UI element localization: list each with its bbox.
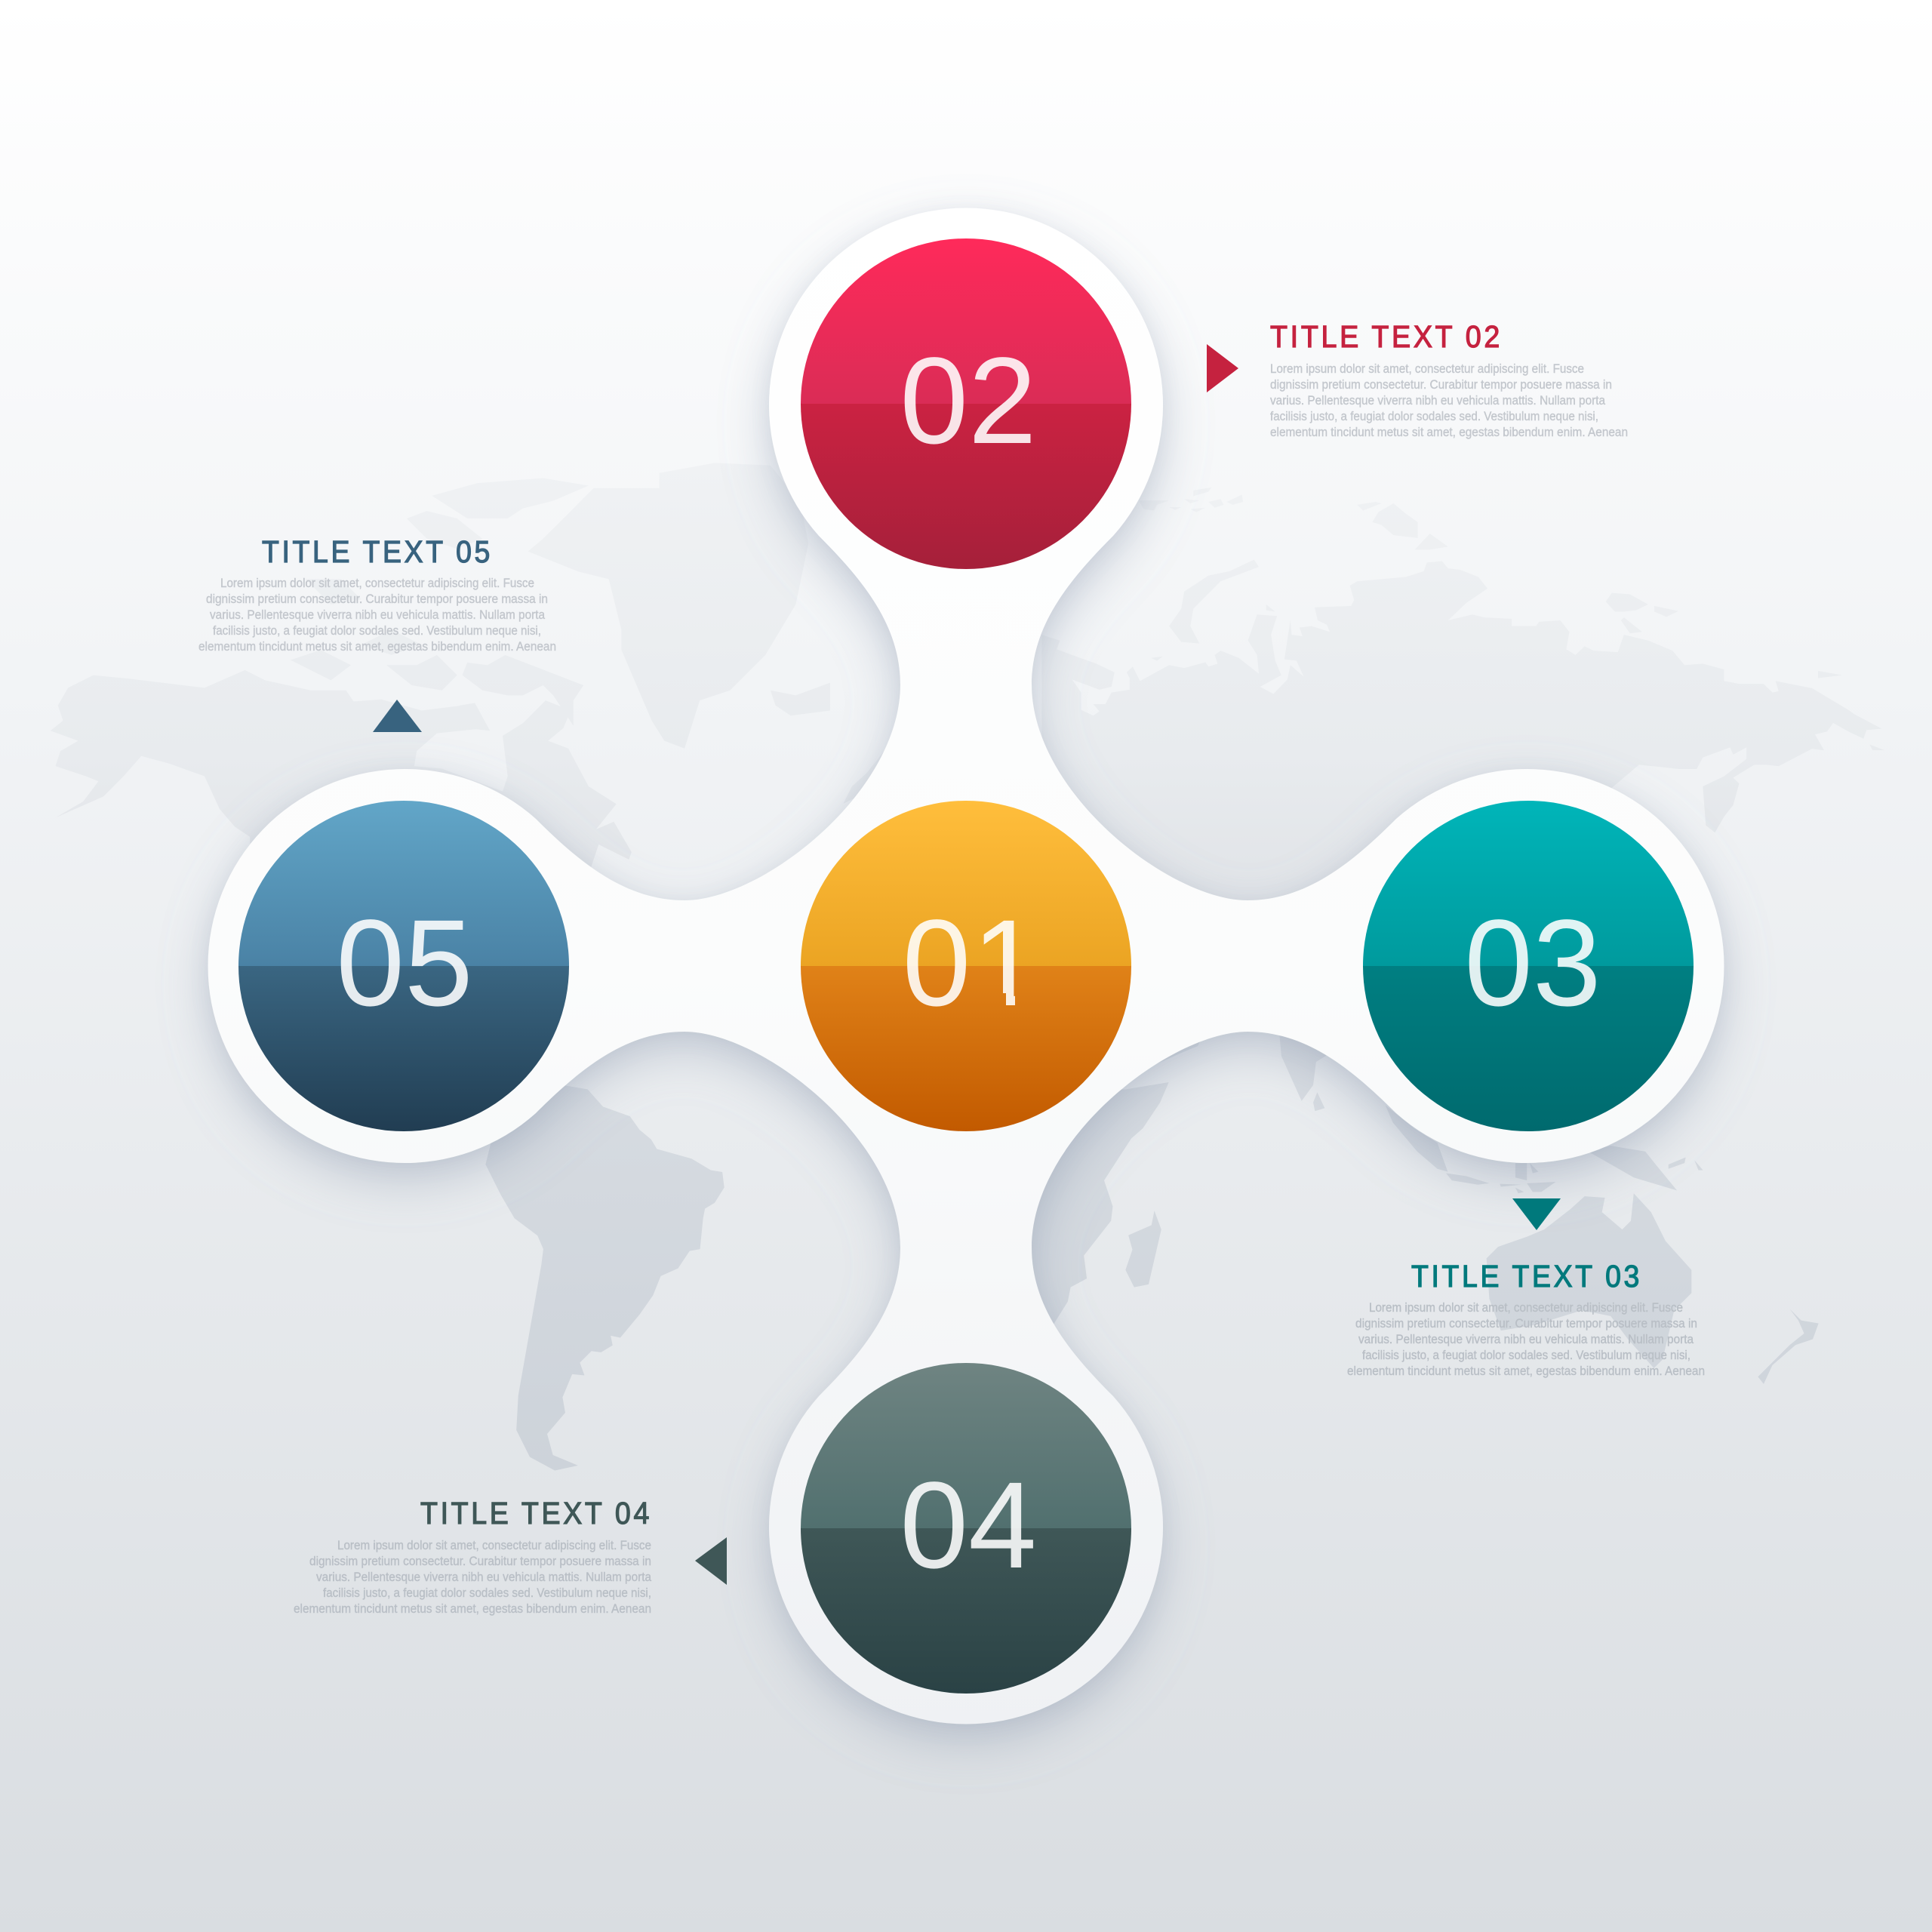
step 04 circle — [801, 1363, 1131, 1694]
text block 02 — [1270, 319, 1628, 439]
arrow 04 — [695, 1537, 727, 1585]
text block 03 — [1347, 1259, 1705, 1378]
text block 04: Lorem ipsum dolor sit amet, consectetur adipiscing elit. Fusce — [337, 1538, 651, 1552]
arrow 03 — [1512, 1198, 1561, 1230]
text block 04: TITLE TEXT 04 — [420, 1496, 652, 1531]
arrow 02 — [1207, 344, 1238, 392]
text block 03: TITLE TEXT 03 — [1411, 1259, 1642, 1294]
text block 02: TITLE TEXT 02 — [1270, 319, 1503, 354]
text block 03: dignissim pretium consectetur. Curabitur tempor posuere massa in — [1355, 1316, 1697, 1331]
text block 03: elementum tincidunt metus sit amet, egestas bibendum enim. Aenean — [1347, 1364, 1705, 1378]
text block 05: dignissim pretium consectetur. Curabitur tempor posuere massa in — [206, 592, 548, 606]
text block 04: elementum tincidunt metus sit amet, egestas bibendum enim. Aenean — [294, 1601, 651, 1616]
text block 04: dignissim pretium consectetur. Curabitur tempor posuere massa in — [309, 1554, 651, 1568]
text block 04: varius. Pellentesque viverra nibh eu vehicula mattis. Nullam porta — [316, 1570, 651, 1584]
text block 05: varius. Pellentesque viverra nibh eu vehicula mattis. Nullam porta — [210, 608, 545, 622]
map: north america, greenland and arctic — [51, 463, 830, 958]
step 03 circle — [1363, 801, 1694, 1131]
map: south america — [485, 1085, 724, 1470]
step 02 circle: 02 — [900, 331, 1037, 469]
text block 02: dignissim pretium consectetur. Curabitur tempor posuere massa in — [1270, 377, 1612, 392]
world map — [51, 463, 1884, 1470]
map: eurasia and arctic islands — [1041, 488, 1884, 903]
step 03 circle: 03 — [1464, 894, 1601, 1032]
step 01 circle — [801, 801, 1131, 1131]
step 01 circle: 0 — [903, 894, 971, 1032]
arrow 05 — [373, 700, 422, 732]
map: africa, india, indonesia, australia, new zealand — [981, 1024, 1819, 1384]
text block 04: facilisis justo, a feugiat dolor sodales sed. Vestibulum neque nisi, — [323, 1586, 651, 1600]
text block 05: Lorem ipsum dolor sit amet, consectetur adipiscing elit. Fusce — [220, 576, 534, 590]
text block 03: varius. Pellentesque viverra nibh eu vehicula mattis. Nullam porta — [1358, 1332, 1694, 1346]
text block 02: Lorem ipsum dolor sit amet, consectetur adipiscing elit. Fusce — [1270, 361, 1584, 376]
text block 05: facilisis justo, a feugiat dolor sodales sed. Vestibulum neque nisi, — [213, 623, 541, 638]
text block 03: facilisis justo, a feugiat dolor sodales sed. Vestibulum neque nisi, — [1362, 1348, 1690, 1362]
text block 03: Lorem ipsum dolor sit amet, consectetur adipiscing elit. Fusce — [1369, 1300, 1683, 1315]
text block 05: TITLE TEXT 05 — [262, 534, 493, 569]
text block 02: elementum tincidunt metus sit amet, egestas bibendum enim. Aenean — [1270, 425, 1628, 439]
text block 05: elementum tincidunt metus sit amet, egestas bibendum enim. Aenean — [198, 639, 556, 654]
text block 02: facilisis justo, a feugiat dolor sodales sed. Vestibulum neque nisi, — [1270, 409, 1598, 423]
step 01 circle: 1 — [972, 894, 1041, 1032]
map: british isles — [843, 752, 884, 804]
step 05 circle — [238, 801, 569, 1131]
central cross shape — [208, 208, 1724, 1724]
step 04 circle: 04 — [900, 1456, 1037, 1594]
text block 04 — [294, 1496, 652, 1616]
step 02 circle — [801, 238, 1131, 569]
text block 05 — [198, 534, 556, 654]
step 05 circle: 05 — [336, 894, 473, 1032]
text block 02: varius. Pellentesque viverra nibh eu vehicula mattis. Nullam porta — [1270, 393, 1605, 408]
